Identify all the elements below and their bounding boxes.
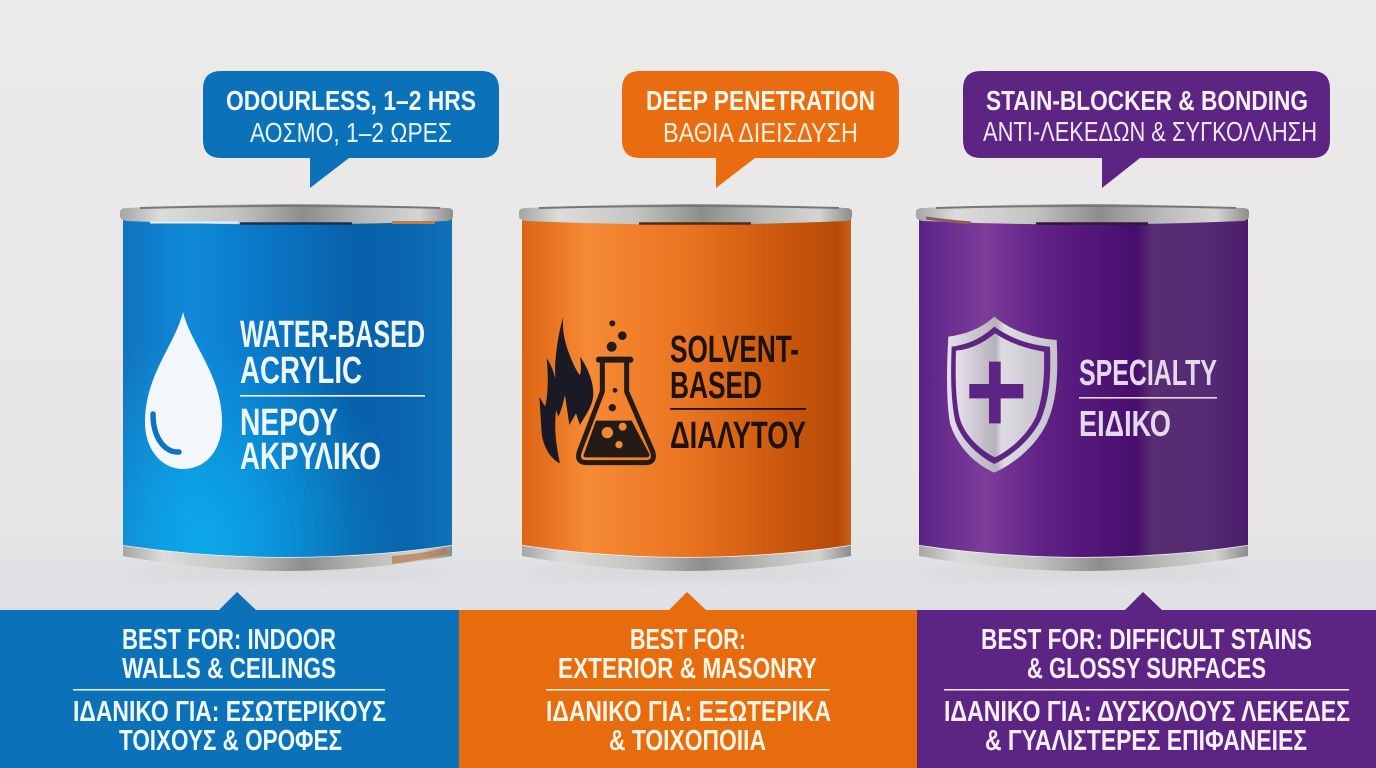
panel: best for solvent-based: BEST FOR:: [630, 624, 746, 656]
icon: flask: [579, 320, 653, 463]
can: solvent-based: [519, 204, 852, 571]
label: specialty: SPECIALTY: [1079, 352, 1217, 393]
panel: best for specialty: & GLOSSY SURFACES: [1027, 653, 1266, 685]
panel: best for water-based: [0, 592, 459, 768]
callout: odourless: ΑΟΣΜΟ, 1–2 ΩΡΕΣ: [250, 117, 452, 148]
callout: odourless: ODOURLESS, 1–2 HRS: [226, 85, 476, 116]
panel: best for water-based: BEST FOR: INDOOR: [122, 624, 336, 656]
label: water-based acrylic: ΝΕΡΟΥ: [240, 402, 338, 444]
label: water-based acrylic: ACRYLIC: [240, 350, 362, 392]
callout: deep penetration: DEEP PENETRATION: [646, 85, 875, 116]
label: solvent-based: ΔΙΑΛΥΤΟΥ: [670, 415, 806, 457]
label: specialty: [1079, 352, 1217, 444]
floor shadows: [119, 566, 1251, 578]
label: water-based acrylic: WATER-BASED: [240, 314, 425, 356]
callout: stain-blocker and bonding: STAIN-BLOCKER & BONDING: [986, 85, 1308, 116]
callout: deep penetration: [622, 71, 899, 188]
callout: odourless: [203, 71, 499, 188]
panel: best for water-based: ΤΟΙΧΟΥΣ & ΟΡΟΦΕΣ: [119, 725, 342, 757]
label: water-based acrylic: ΑΚΡΥΛΙΚΟ: [240, 436, 381, 478]
callout: stain-blocker and bonding: [963, 71, 1330, 188]
panel: best for specialty: [917, 592, 1376, 768]
panel: best for solvent-based: EXTERIOR & MASONRY: [558, 653, 817, 685]
icon: flame: [539, 317, 593, 463]
panel: best for water-based: WALLS & CEILINGS: [122, 653, 336, 685]
panel: best for water-based: ΙΔΑΝΙΚΟ ΓΙΑ: ΕΣΩΤΕΡΙΚΟΥΣ: [73, 696, 386, 728]
can: water-based acrylic: [120, 204, 453, 571]
label: water-based acrylic: [240, 314, 425, 478]
label: solvent-based: SOLVENT-: [670, 329, 799, 371]
can: specialty: [916, 204, 1249, 571]
icon: shield with cross: [947, 317, 1057, 473]
panel: best for solvent-based: [459, 592, 917, 768]
icon: water drop: [145, 312, 222, 469]
callout: deep penetration: ΒΑΘΙΑ ΔΙΕΙΣΔΥΣΗ: [663, 117, 858, 148]
label: solvent-based: BASED: [670, 365, 762, 407]
label: solvent-based: [670, 329, 806, 457]
panel: best for solvent-based: ΙΔΑΝΙΚΟ ΓΙΑ: ΕΞΩΤΕΡΙΚΑ: [546, 696, 831, 728]
panel: best for solvent-based: & ΤΟΙΧΟΠΟΙΙΑ: [609, 725, 766, 757]
label: specialty: ΕΙΔΙΚΟ: [1079, 403, 1171, 444]
